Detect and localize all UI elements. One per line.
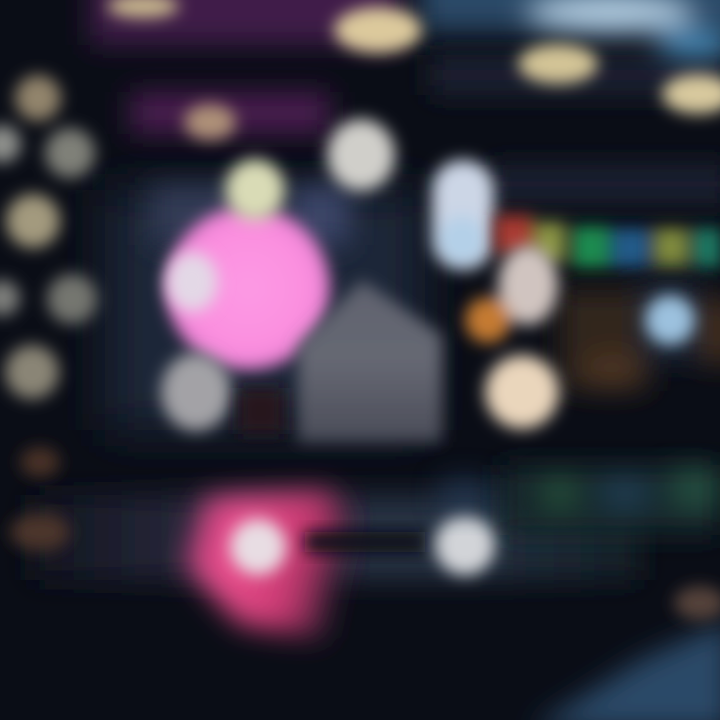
gray box: [298, 280, 442, 442]
top right sky highlight: [525, 0, 720, 57]
colour strip: [495, 215, 720, 268]
tall pale capsule: [432, 160, 494, 270]
brown panels: [560, 280, 720, 390]
dark stem under pink circle: [238, 388, 284, 434]
pink reflection: [185, 490, 495, 640]
right icons: [465, 245, 695, 429]
top ceiling lights: [107, 0, 720, 140]
central pink circle: [161, 119, 395, 431]
left column icons: [0, 75, 97, 551]
reflected colour strip: [440, 468, 720, 510]
bottom right light: [674, 586, 720, 620]
